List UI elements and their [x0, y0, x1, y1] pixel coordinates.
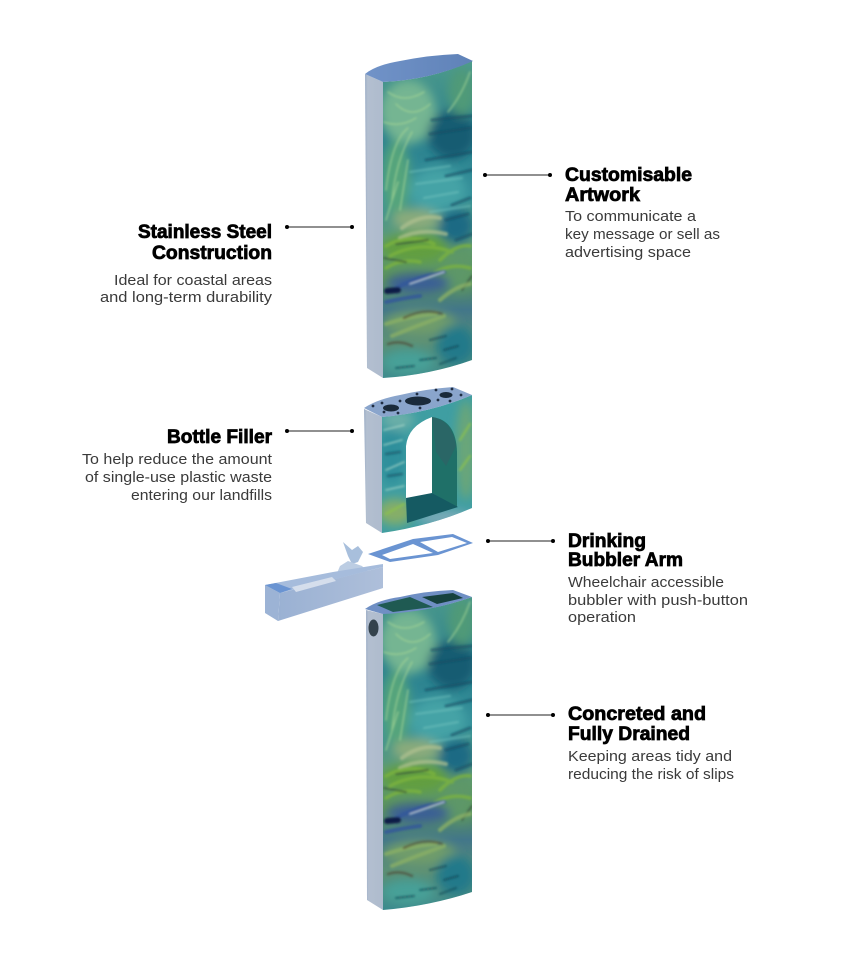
description: Keeping areas tidy and: [568, 749, 732, 765]
callout: drinking bubbler arm: [486, 531, 748, 626]
callout: bottle filler: [82, 427, 354, 504]
panel: bottle filler section: [364, 387, 476, 535]
side hole: [368, 620, 378, 636]
description: reducing the risk of slips: [568, 767, 734, 783]
leader line: [285, 225, 354, 229]
bubbler shroud: [330, 561, 368, 590]
heading: Bubbler Arm: [568, 550, 683, 571]
heading: Artwork: [565, 185, 640, 206]
description: key message or sell as: [565, 227, 720, 243]
heading: Concreted and: [568, 704, 706, 725]
leader line: [486, 713, 555, 717]
top cap: [365, 54, 473, 82]
description: Wheelchair accessible: [568, 575, 724, 591]
description: To help reduce the amount: [82, 452, 272, 468]
customisable artwork panel: [380, 60, 476, 380]
leader line: [483, 173, 552, 177]
perforated grille: [292, 577, 336, 592]
callout: customisable artwork: [483, 165, 720, 261]
heading: Fully Drained: [568, 724, 690, 745]
filler top plate with holes: [364, 387, 472, 417]
arch opening: white: [406, 417, 432, 500]
box front: [278, 567, 383, 621]
leader line: [486, 539, 555, 543]
side face of filler: [364, 409, 382, 533]
heading: Customisable: [565, 165, 692, 186]
panel: lower concreted section: [365, 590, 476, 910]
heading: Stainless Steel: [138, 222, 272, 243]
panel: top stainless steel section: [365, 54, 476, 380]
description: bubbler with push-button: [568, 593, 748, 609]
heading: Bottle Filler: [167, 427, 273, 448]
description: of single-use plastic waste: [85, 470, 272, 486]
callout: stainless steel construction: [100, 222, 354, 306]
description: entering our landfills: [131, 488, 272, 504]
callout: concreted and fully drained: [486, 704, 734, 783]
lower artwork: [380, 590, 476, 910]
panel: drinking bubbler arm assembly: [265, 534, 473, 621]
filler artwork: [382, 395, 472, 533]
box left face: [265, 585, 280, 621]
blue end of box top: [265, 583, 292, 593]
side face: [366, 610, 383, 910]
description: advertising space: [565, 245, 691, 261]
arch interior: dark teal: [432, 417, 457, 507]
heading: Construction: [152, 243, 272, 264]
mounting plate: [368, 534, 473, 562]
description: Ideal for coastal areas: [114, 273, 272, 289]
top rim with compartments: [365, 590, 472, 614]
bubbler head: [343, 542, 363, 564]
side face of top section: [365, 74, 383, 378]
heading: Drinking: [568, 531, 646, 552]
box top: [265, 564, 383, 593]
description: operation: [568, 610, 636, 626]
description: To communicate a: [565, 209, 697, 225]
leader line: [285, 429, 354, 433]
description: and long-term durability: [100, 290, 273, 306]
